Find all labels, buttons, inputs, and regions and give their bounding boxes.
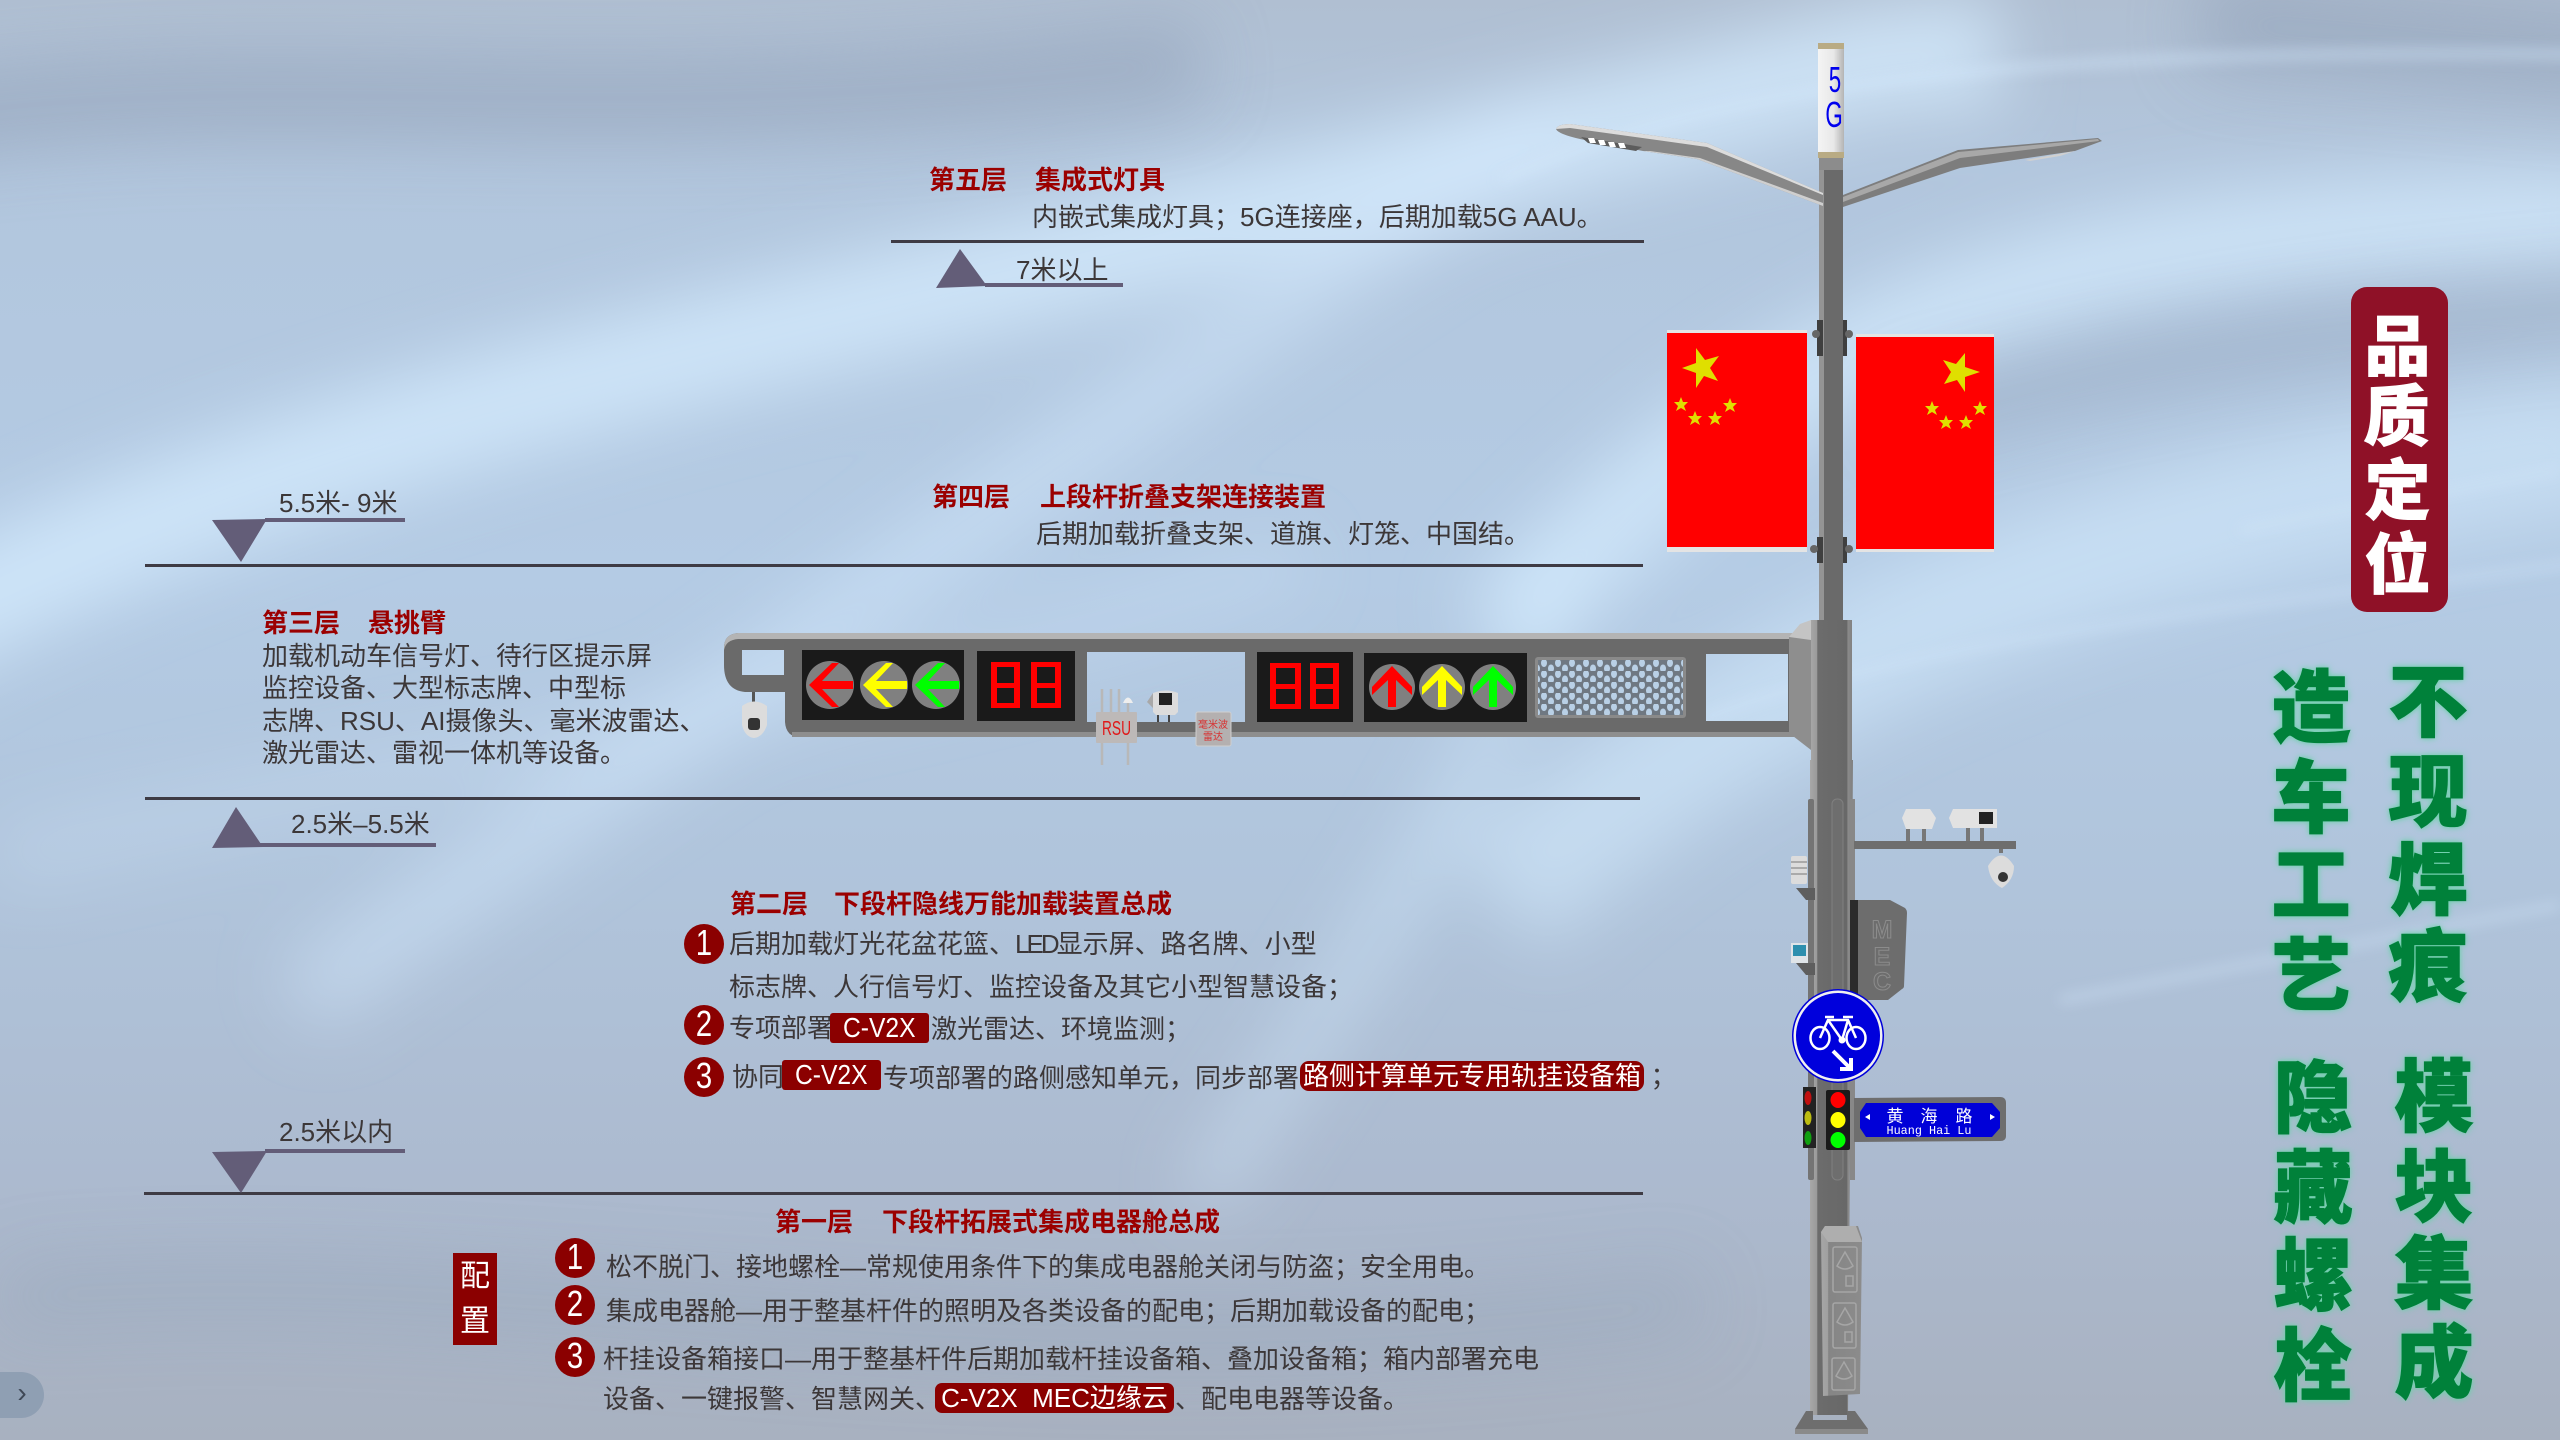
- millimeter wave radar: 雷达: [1203, 731, 1223, 743]
- tag C-V2X: C-V2X: [843, 1012, 916, 1043]
- number badge 3: 3: [696, 1055, 712, 1096]
- number badge 3: 3: [567, 1335, 583, 1376]
- number badge 2: [684, 1005, 724, 1045]
- slogan column 4: 集: [2394, 1230, 2474, 1319]
- layer 2 text block: 第二层: [730, 889, 808, 919]
- layer 2 text block: 专项部署的路侧感知单元，同步部署: [883, 1058, 1299, 1095]
- 5G antenna tube: 5: [1829, 61, 1841, 100]
- slogan column 2: 不: [2388, 658, 2468, 747]
- flag right: [1856, 334, 1994, 552]
- quality badge: 质: [2364, 380, 2430, 454]
- layer 5 text block: 集成式灯具: [1035, 165, 1165, 195]
- left dome camera: [742, 692, 767, 738]
- number badge 1: [684, 924, 724, 964]
- 5G antenna tube: [1818, 43, 1844, 170]
- slogan column 1: 造: [2272, 664, 2350, 753]
- street name sign: Huang Hai Lu: [1887, 1124, 1971, 1138]
- slogan column 3: 隐: [2274, 1054, 2352, 1143]
- number badge 3: [684, 1057, 724, 1097]
- electrical cabin: [1821, 1226, 1862, 1396]
- layer 1 text block: 松不脱门、接地螺栓—常规使用条件下的集成电器舱关闭与防盗；安全用电。: [606, 1247, 1490, 1284]
- left signal panel: [802, 650, 964, 720]
- marker: 7m up: [936, 249, 1123, 288]
- layer 2 text block: [684, 889, 1670, 1097]
- street name sign: 黄: [1886, 1107, 1904, 1126]
- quality badge: 品: [2364, 310, 2430, 384]
- page toggle button: [0, 1372, 44, 1418]
- layer 2 text block: 后期加载灯光花盆花篮、LED显示屏、路名牌、小型: [729, 929, 1317, 959]
- slogan column 3: 藏: [2274, 1144, 2352, 1233]
- layer 3 text block: 激光雷达、雷视一体机等设备。: [262, 738, 626, 768]
- cantilever arm: [724, 620, 1811, 750]
- layer 2 text block: ；: [1644, 1058, 1670, 1095]
- marker: 2.5m down: [212, 1149, 405, 1193]
- configuration tag: [453, 1253, 497, 1345]
- mesh panel: [1535, 657, 1686, 718]
- number badge 2: 2: [567, 1283, 583, 1324]
- MEC box: E: [1874, 943, 1890, 971]
- number badge 2: [555, 1285, 595, 1325]
- layer 3 text block: 加载机动车信号灯、待行区提示屏: [262, 641, 652, 671]
- number badge 1: 1: [696, 922, 712, 963]
- slogan column 4: [2392, 1052, 2476, 1408]
- quality badge: [2351, 287, 2448, 612]
- layer 1 text block: 第一层: [775, 1207, 853, 1237]
- right countdown display: [1257, 652, 1353, 722]
- tag MEC edge cloud: C-V2X MEC边缘云: [941, 1383, 1168, 1413]
- layer 2 text block: 下段杆隐线万能加载装置总成: [834, 889, 1172, 919]
- number badge 1: 1: [567, 1236, 583, 1277]
- slogan column 3: [2271, 1054, 2356, 1411]
- RSU unit: [1096, 689, 1137, 765]
- side sensor arm: [1854, 809, 2016, 888]
- street name sign: 海: [1920, 1107, 1938, 1126]
- marker: 5.5-9m down: [212, 518, 405, 562]
- millimeter wave radar: 毫米波: [1198, 718, 1228, 731]
- layer 1 text block: 设备、一键报警、智慧网关、: [603, 1384, 941, 1414]
- layer 4 text block: [932, 482, 1530, 549]
- layer 3 text block: 监控设备、大型标志牌、中型标: [262, 673, 626, 703]
- 5G antenna tube: G: [1825, 96, 1843, 135]
- AI camera: [1147, 690, 1178, 722]
- configuration tag: 置: [460, 1305, 490, 1338]
- RSU unit: RSU: [1102, 718, 1131, 740]
- smart pole illustration: [724, 43, 2102, 1434]
- slogan column 1: 车: [2272, 754, 2350, 843]
- bicycle sign: [1792, 989, 1884, 1083]
- flag left: [1667, 330, 1807, 552]
- slogan column 2: [2386, 658, 2470, 1012]
- height label: 5.5米-9米: 5.5米- 9米: [279, 488, 398, 518]
- right signal panel: [1364, 653, 1527, 722]
- slogan column 3: 栓: [2274, 1322, 2352, 1411]
- tag roadside computing: 路侧计算单元专用轨挂设备箱: [1303, 1061, 1641, 1091]
- quality badge: 位: [2364, 528, 2430, 602]
- lamp arms and luminaires: [1556, 124, 2102, 207]
- layer 1 text block: 杆挂设备箱接口—用于整基杆件后期加载杆挂设备箱、叠加设备箱；箱内部署充电: [603, 1339, 1539, 1376]
- main pedestrian signal: [1826, 1090, 1850, 1150]
- slogan column 1: 工: [2272, 841, 2350, 930]
- side pedestrian signal: [1803, 1087, 1816, 1148]
- slogan column 2: 痕: [2388, 923, 2468, 1012]
- base plate: [1795, 1411, 1868, 1434]
- slogan column 2: 焊: [2388, 836, 2468, 925]
- layer 1 text block: 集成电器舱—用于整基杆件的照明及各类设备的配电；后期加载设备的配电；: [606, 1291, 1490, 1328]
- divider lines and height markers: [144, 126, 2367, 1376]
- layer 1 text block: 下段杆拓展式集成电器舱总成: [882, 1207, 1220, 1237]
- layer 1 text block: 、配电电器等设备。: [1175, 1384, 1409, 1414]
- millimeter wave radar: [1196, 712, 1231, 746]
- layer 2 text block: 专项部署: [729, 1013, 833, 1043]
- slogan column 4: 块: [2394, 1143, 2474, 1232]
- MEC box: C: [1873, 968, 1891, 996]
- quality badge: 定: [2364, 454, 2430, 528]
- number badge 3: [555, 1337, 595, 1377]
- layer 3 text block: 志牌、RSU、AI摄像头、毫米波雷达、: [262, 706, 705, 736]
- layer 3 text block: 悬挑臂: [368, 608, 446, 638]
- street name sign: [1854, 1097, 2006, 1142]
- slogan column 4: 成: [2394, 1319, 2474, 1408]
- layer 2 text block: 激光雷达、环境监测；: [931, 1009, 1191, 1046]
- weather sensor and lidar: [1791, 856, 1815, 975]
- slogan column 1: 艺: [2272, 932, 2350, 1021]
- layer 2 text block: 协同: [732, 1062, 784, 1092]
- page toggle button: ›: [17, 1377, 27, 1408]
- layer 3 text block: [262, 608, 705, 768]
- left countdown display: [977, 651, 1075, 721]
- pole shaft: [1808, 158, 1855, 1415]
- street name sign: 路: [1956, 1107, 1972, 1126]
- layer 2 text block: 标志牌、人行信号灯、监控设备及其它小型智慧设备；: [729, 967, 1353, 1004]
- MEC box: [1850, 900, 1907, 1000]
- MEC box: M: [1872, 916, 1892, 944]
- slogan column 2: 现: [2388, 748, 2468, 837]
- layer 4 text block: 第四层: [932, 482, 1010, 512]
- number badge 2: 2: [696, 1003, 712, 1044]
- height label: 2.5米以内: 2.5米以内: [279, 1117, 393, 1147]
- marker: 2.5-5.5m up: [212, 807, 436, 848]
- height label: 2.5米-5.5米: 2.5米–5.5米: [291, 809, 430, 839]
- layer 3 text block: 第三层: [262, 608, 340, 638]
- slogan column 3: 螺: [2274, 1232, 2352, 1321]
- flag brackets: [1810, 320, 1853, 563]
- configuration tag: 配: [460, 1260, 490, 1293]
- layer 4 text block: 后期加载折叠支架、道旗、灯笼、中国结。: [1036, 519, 1530, 549]
- layer 1 text block: [555, 1207, 1539, 1414]
- layer 5 text block: [929, 165, 1603, 234]
- layer 5 text block: 内嵌式集成灯具；5G连接座，后期加载5G AAU。: [1032, 197, 1603, 234]
- layer 5 text block: 第五层: [929, 165, 1007, 195]
- height label: 7米以上: 7米以上: [1016, 255, 1108, 285]
- number badge 1: [555, 1238, 595, 1278]
- layer 4 text block: 上段杆折叠支架连接装置: [1040, 482, 1326, 512]
- tag C-V2X: C-V2X: [795, 1059, 868, 1090]
- slogan column 4: 模: [2394, 1053, 2474, 1142]
- slogan column 1: [2270, 664, 2353, 1021]
